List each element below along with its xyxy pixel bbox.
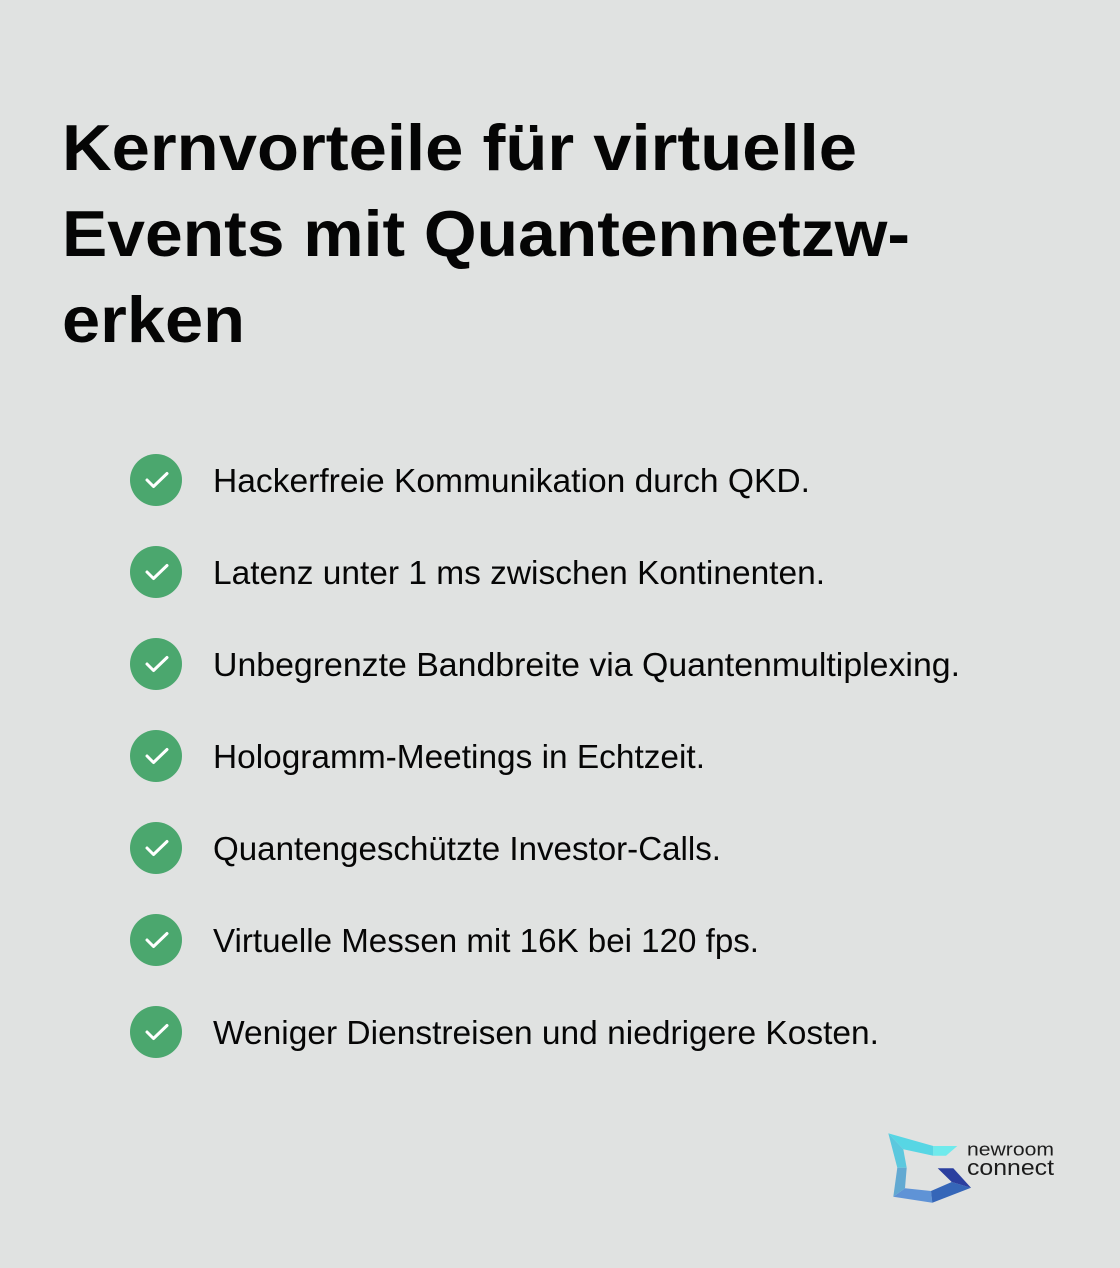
item: Latenz: Latenz unter 1 ms zwischen Kontinenten.: [213, 554, 825, 591]
logo wordmark: newroom: [967, 1140, 1054, 1160]
logo: newroom connect: [888, 1133, 1054, 1203]
item: Dienstreisen: [130, 1006, 879, 1058]
title: Kernvorteile für virtuelle: [62, 111, 857, 184]
item: Latenz: [130, 546, 825, 598]
logo wordmark: connect: [967, 1155, 1054, 1180]
item: Virtuelle Messen: Virtuelle Messen mit 16K bei 120 fps.: [213, 922, 759, 959]
item: Bandbreite: Unbegrenzte Bandbreite via Quantenmultiplexing.: [213, 646, 960, 683]
item: Hologramm-Meetings: [130, 730, 705, 782]
logo wordmark: [967, 1140, 1054, 1180]
title: [62, 111, 910, 356]
title: erken: [62, 283, 245, 356]
item: Virtuelle Messen: [130, 914, 759, 966]
item: Hackerfreie Kommunikation: [130, 454, 810, 506]
item: Bandbreite: [130, 638, 960, 690]
item: Dienstreisen: Weniger Dienstreisen und niedrigere Kosten.: [213, 1014, 879, 1051]
item: Hackerfreie Kommunikation: Hackerfreie Kommunikation durch QKD.: [213, 462, 810, 499]
checklist: [130, 454, 960, 1058]
item: Investor-Calls: Quantengeschützte Investor-Calls.: [213, 830, 721, 867]
title: Events mit Quantennetzw-: [62, 197, 910, 270]
item: Investor-Calls: [130, 822, 721, 874]
item: Hologramm-Meetings: Hologramm-Meetings in Echtzeit.: [213, 738, 705, 775]
